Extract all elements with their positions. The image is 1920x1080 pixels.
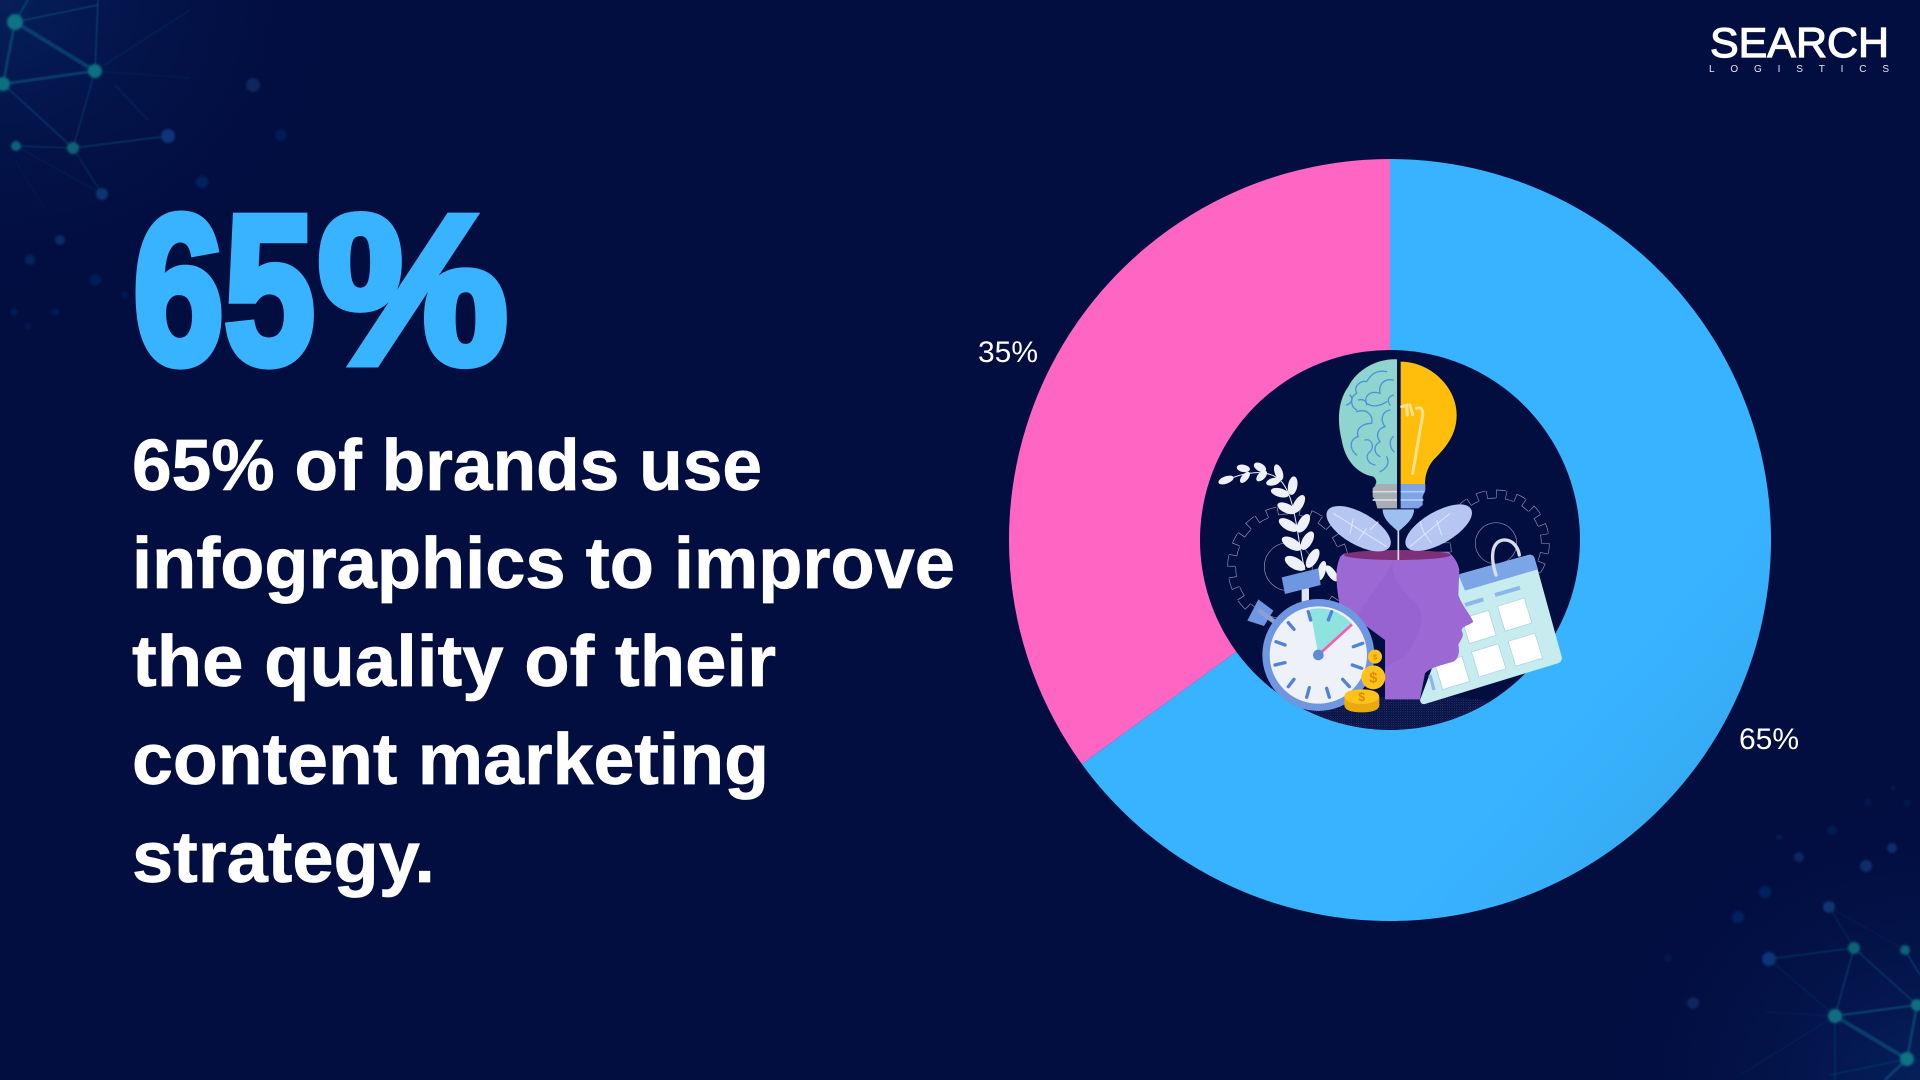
description text: the quality of their [132, 622, 776, 702]
description text [132, 426, 955, 898]
logo wordmark: SEARCH [1710, 19, 1889, 66]
icon: coins: $ [1358, 690, 1365, 704]
network pattern: bottom right [1560, 760, 1920, 1080]
big statistic: % [318, 171, 508, 408]
big statistic [133, 171, 508, 408]
icon: brain and light bulb [1339, 359, 1457, 532]
label: 35%: 35% [978, 336, 1038, 369]
center illustration [1217, 359, 1562, 730]
logo tagline: LOGISTICS [1709, 64, 1889, 75]
description text: infographics to improve [132, 524, 955, 604]
bulb base [1373, 484, 1397, 508]
icon: coins: $ [1373, 652, 1377, 661]
icon: calendar [1420, 540, 1562, 704]
donut chart [1009, 159, 1771, 921]
icon: coins [1344, 650, 1385, 712]
icon: sprout stem and leaves [1319, 495, 1479, 561]
network pattern: top left [0, 0, 380, 340]
label: 65%: 65% [1739, 723, 1799, 756]
big statistic: 65 [133, 171, 315, 408]
icon: coins: $ [1369, 671, 1377, 687]
slice: 35% pink [1009, 159, 1390, 764]
logo [1709, 19, 1889, 75]
description text: content marketing [132, 720, 769, 800]
icon: purple head [1336, 550, 1473, 699]
description text: strategy. [132, 818, 435, 898]
speckled ground [1308, 698, 1490, 730]
icon: right gear [1443, 490, 1549, 597]
slice: 65% blue [1082, 159, 1771, 921]
icon: left gear [1228, 506, 1349, 627]
icon: white plant sprig [1217, 461, 1340, 583]
icon: stopwatch [1247, 568, 1374, 711]
description text: 65% of brands use [132, 426, 762, 506]
